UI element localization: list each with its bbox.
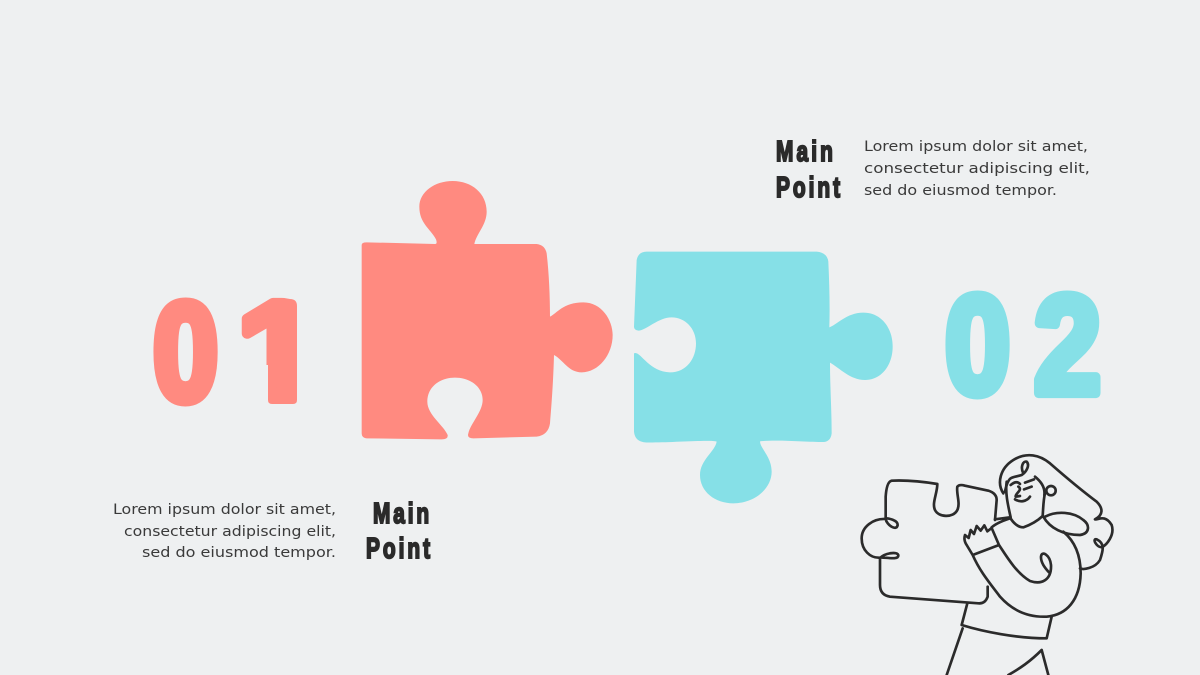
puzzle piece: blue — [634, 252, 893, 503]
number 01: 0 — [153, 274, 218, 430]
heading: main point bottom: Point — [366, 533, 431, 565]
hair — [1000, 455, 1112, 569]
number 01: 1 — [237, 273, 320, 429]
text block: bottom description: Lorem ipsum dolor sit amet, — [113, 501, 336, 518]
text block: bottom description: consectetur adipiscing elit, — [124, 523, 336, 540]
heading: main point top — [776, 136, 841, 204]
text block: top description: Lorem ipsum dolor sit amet, — [864, 138, 1088, 155]
number 01 — [153, 298, 297, 406]
heading: main point bottom: Main — [373, 498, 429, 530]
face — [1011, 479, 1034, 501]
torso and legs — [947, 603, 1052, 675]
heading: main point top: Point — [776, 172, 841, 204]
text block: top description — [864, 138, 1090, 199]
number 02 — [945, 266, 1101, 423]
hand and arm — [964, 525, 1081, 617]
number 02: 0 — [945, 267, 1010, 423]
shoulder and neck — [992, 482, 1045, 527]
text block: bottom description — [113, 501, 336, 561]
puzzle outline held by woman — [862, 481, 997, 603]
heading: main point bottom — [366, 498, 431, 565]
number 02: 2 — [1034, 266, 1101, 423]
text block: top description: consectetur adipiscing elit, — [864, 160, 1090, 177]
earring — [1046, 486, 1056, 495]
text block: bottom description: sed do eiusmod tempor. — [142, 544, 336, 561]
puzzle piece: red — [362, 181, 613, 439]
heading: main point top: Main — [776, 136, 833, 168]
illustration: woman holding puzzle piece — [862, 455, 1112, 675]
text block: top description: sed do eiusmod tempor. — [864, 182, 1057, 199]
